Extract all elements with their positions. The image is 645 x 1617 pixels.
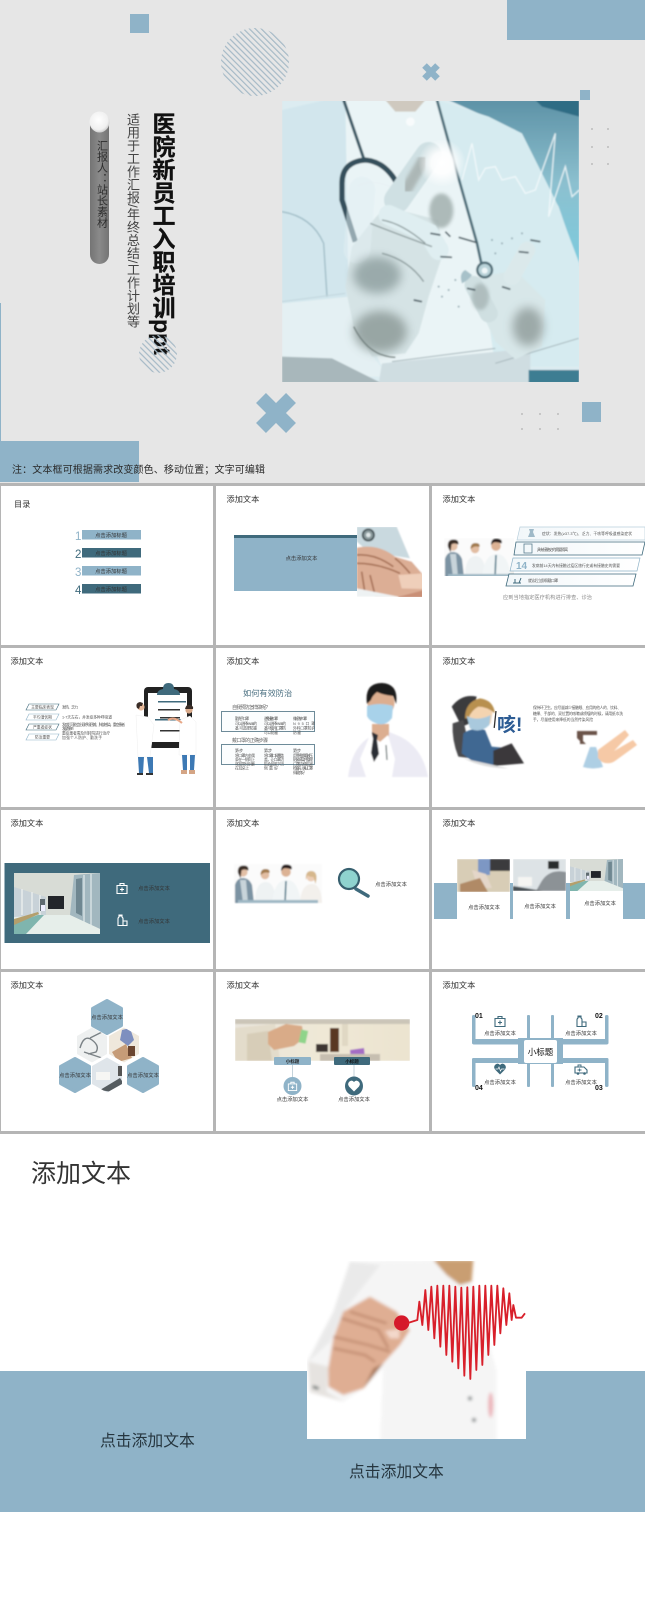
list: info labels: 防治重要 bbox=[35, 734, 50, 740]
card: dark band: 点击添加文本 bbox=[138, 884, 171, 892]
list: table of contents: 1 bbox=[75, 531, 81, 543]
panel: four-quadrant slide bbox=[432, 972, 645, 1131]
table: self prevention: N95口罩 bbox=[293, 721, 315, 726]
hex photo: chair bbox=[92, 1058, 122, 1092]
table: mask steps: 将口罩口鼻覆盖 bbox=[264, 753, 284, 758]
table: mask steps: 口罩边缘贴紧 bbox=[293, 762, 313, 766]
table: mask steps: 第二步 bbox=[264, 748, 272, 753]
text block: blue card: 点击添加文本 bbox=[286, 554, 318, 562]
decor: bottom-left block bbox=[0, 441, 139, 482]
diagram: rounded quadrants: 02 bbox=[595, 1013, 603, 1020]
photo: doctors bbox=[444, 538, 514, 576]
heading: 添加文本 bbox=[226, 656, 259, 666]
table: mask steps: 将口罩内金属 bbox=[235, 753, 255, 758]
tag: subtitle 2: 小标题 bbox=[345, 1058, 359, 1065]
table: self prevention bbox=[222, 704, 315, 735]
photo: lab bbox=[235, 1019, 410, 1061]
icon: big cross bbox=[261, 398, 291, 428]
photo: hands bbox=[357, 527, 422, 597]
list: info labels: 平均潜伏期 bbox=[33, 714, 52, 720]
step list: 具有接触史的需要隔离 bbox=[537, 547, 568, 552]
panel: clipboard slide bbox=[1, 648, 213, 807]
icon: bottles bbox=[577, 1016, 586, 1026]
decor: top-right block bbox=[507, 0, 645, 40]
table: self prevention: 自我预防怎样做呢? bbox=[232, 704, 268, 711]
step list: 14 bbox=[516, 561, 528, 572]
list: info labels: 严重者症状 bbox=[33, 724, 52, 730]
list: table of contents: 3 bbox=[75, 567, 81, 579]
photo: corridor bbox=[570, 859, 623, 891]
text: 点击添加文本 bbox=[375, 880, 408, 888]
heading: 添加文本 bbox=[226, 494, 259, 504]
list: info labels: 主要临床表现 bbox=[31, 704, 54, 710]
title: vertical heading: 医院新员工入职培训ppt bbox=[149, 112, 176, 355]
illustration: masked doctor bbox=[348, 683, 428, 777]
table: mask steps: 贴合鼻梁下巴 bbox=[264, 762, 284, 766]
icon: ambulance bbox=[575, 1065, 587, 1075]
diagram: rounded quadrants: 小标题 bbox=[528, 1047, 554, 1057]
panel: slide with doctors and steps bbox=[432, 486, 645, 645]
heading: 添加文本 bbox=[31, 1160, 131, 1188]
band bbox=[0, 1371, 645, 1512]
list: info labels: 发病后可能会出现呼吸困难、肺部感染，重症患者 bbox=[62, 722, 125, 727]
list: info labels: 发展为肺炎 bbox=[62, 726, 74, 731]
table: mask steps: 佩戴良好 bbox=[293, 770, 305, 775]
note text: 注：文本框可根据需求改变颜色、移动位置；文字可编辑 bbox=[12, 463, 265, 476]
illustration: clipboard and two doctors bbox=[136, 683, 196, 775]
icon: medkit bbox=[117, 884, 127, 894]
step list: 就诊后立即佩戴口罩 bbox=[528, 578, 558, 583]
icon: heart bbox=[494, 1064, 506, 1074]
panel: corridor slide bbox=[1, 810, 213, 969]
decor: square bottom right bbox=[582, 402, 601, 422]
icon: medkit circle bbox=[284, 1077, 302, 1095]
list: table of contents: 点击添加标题 bbox=[95, 549, 128, 557]
hex photo: stethoscope bbox=[77, 1028, 107, 1062]
table: mask steps: 在耳朵上 bbox=[235, 766, 249, 770]
table: self prevention: 基 可使用口罩防 bbox=[264, 726, 286, 730]
captions: 点击添加文本 bbox=[277, 1095, 309, 1103]
table: self prevention: 基 可选择防霾 bbox=[235, 726, 257, 730]
decor: left thin line bbox=[0, 303, 1, 441]
tag: subtitle 1 bbox=[274, 1057, 311, 1065]
table: mask steps: 将耳带分别套 bbox=[235, 762, 255, 766]
step list bbox=[506, 527, 645, 586]
hexagon cluster bbox=[59, 1000, 160, 1094]
table: self prevention: 防霾 bbox=[293, 730, 301, 735]
diagram: rounded quadrants: 点击添加文本 bbox=[484, 1078, 517, 1086]
decor: small square at photo corner bbox=[580, 90, 590, 100]
captions: 点击添加文本 bbox=[468, 903, 501, 911]
card: dark band bbox=[4, 863, 210, 943]
icon: heart circle bbox=[345, 1076, 363, 1096]
caption: 应到当地指定医疗机构进行排查、诊治 bbox=[503, 593, 592, 601]
captions bbox=[468, 899, 617, 911]
list: info labels: 重症患者需及时转院进行治疗 bbox=[62, 730, 110, 736]
table: self prevention: 勤洗手口罩 bbox=[235, 716, 249, 721]
decor: striped circle bbox=[221, 28, 289, 96]
panel: cough and handwash slide bbox=[432, 648, 645, 807]
hexagon cluster: 点击添加文本 bbox=[59, 1071, 92, 1079]
table: mask steps: 条在一侧向上 bbox=[235, 757, 255, 762]
captions bbox=[277, 1095, 371, 1103]
text: right caption: 点击添加文本 bbox=[349, 1463, 444, 1481]
card: dark band: 点击添加文本 bbox=[138, 917, 171, 925]
heading: 添加文本 bbox=[226, 818, 259, 828]
decor: small striped circle bbox=[139, 335, 178, 373]
table: mask steps bbox=[222, 737, 314, 775]
heading: 添加文本 bbox=[442, 818, 475, 828]
icon: bottles bbox=[118, 915, 127, 926]
list: table of contents: 点击添加标题 bbox=[95, 585, 128, 593]
heading: contents: 目录 bbox=[14, 500, 30, 509]
heading: 添加文本 bbox=[442, 494, 475, 504]
list: table of contents: 点击添加标题 bbox=[95, 531, 128, 539]
table: mask steps: 佩戴好 bbox=[264, 766, 278, 770]
table: self prevention: 可以防霾 bbox=[264, 730, 278, 735]
diagram: rounded quadrants: 03 bbox=[595, 1085, 603, 1092]
panel: three photos slide bbox=[432, 810, 645, 969]
heading: 添加文本 bbox=[10, 980, 43, 990]
connectors bbox=[292, 1065, 354, 1078]
panel: prevention slide bbox=[216, 648, 429, 807]
photo: nurse drawing heart bbox=[307, 1260, 526, 1442]
photo: dental chair bbox=[513, 859, 566, 891]
heading: 添加文本 bbox=[226, 980, 259, 990]
pill: presenter bbox=[90, 112, 110, 264]
diagram: rounded quadrants: 点击添加文本 bbox=[565, 1078, 598, 1086]
diagram: rounded quadrants: 点击添加文本 bbox=[484, 1029, 517, 1037]
table: mask steps: 用手将金属条按压 bbox=[293, 753, 313, 758]
subtitle: vertical: 适用于工作汇报/年终总结/工作计划等 bbox=[125, 113, 140, 329]
list: table of contents: 点击添加标题 bbox=[95, 567, 128, 575]
text: left caption: 点击添加文本 bbox=[100, 1432, 195, 1450]
list: info labels: 1-7天左右，并发症多种呼吸道 bbox=[62, 714, 112, 720]
photo: treatment bbox=[457, 859, 510, 892]
illustration: coughing person bbox=[452, 696, 524, 768]
subheading: prevention: 如何有效防治 bbox=[243, 688, 292, 698]
hexagon cluster: 点击添加文本 bbox=[127, 1071, 160, 1079]
table: mask steps: 戴口罩的正确步骤 bbox=[232, 737, 268, 744]
list: table of contents: 4 bbox=[75, 585, 82, 597]
list: table of contents bbox=[75, 530, 141, 597]
decor: small top square bbox=[130, 14, 149, 33]
panel: contents slide bbox=[1, 486, 213, 645]
diagram: rounded quadrants: 点击添加文本 bbox=[565, 1029, 598, 1037]
heading: 添加文本 bbox=[442, 980, 475, 990]
icon: small cross bbox=[424, 66, 438, 78]
table: mask steps: 第三步 bbox=[293, 748, 301, 753]
list: info labels: 加强个人防护、勤洗手 bbox=[62, 735, 102, 740]
captions: 点击添加文本 bbox=[524, 902, 557, 910]
table: self prevention: 做好防护口罩 bbox=[293, 716, 307, 721]
panel: final slide bbox=[0, 1134, 645, 1617]
photo: doctors bbox=[234, 864, 322, 903]
text block: hygiene advice bbox=[533, 705, 623, 722]
decor: dot grid right bbox=[591, 128, 609, 165]
table: mask steps: 第一步 bbox=[235, 748, 243, 753]
table: self prevention: 可以选择KN95的 bbox=[264, 721, 286, 726]
captions: 点击添加文本 bbox=[338, 1095, 371, 1103]
decor: dot grid bottom bbox=[521, 413, 559, 430]
list: info labels: 发热、乏力 bbox=[62, 704, 78, 710]
heading: 添加文本 bbox=[442, 656, 475, 666]
illustration: handwashing bbox=[577, 730, 637, 768]
text block: blue card bbox=[234, 535, 357, 591]
table: self prevention: 避免接触口罩 bbox=[264, 716, 278, 721]
panel: cover slide bbox=[0, 0, 645, 483]
icon: magnifier bbox=[339, 869, 368, 896]
hexagon cluster: 点击添加文本 bbox=[91, 1013, 124, 1021]
table: mask steps: 检查完，确认口罩 bbox=[293, 766, 313, 770]
diagram: rounded quadrants bbox=[472, 1013, 608, 1092]
panel: lab photo slide bbox=[216, 972, 429, 1131]
table: mask steps: 盖，让口罩边 bbox=[264, 757, 284, 762]
table: mask steps: 贴紧鼻梁并整理 bbox=[293, 757, 313, 762]
text block: hygiene advice: 糖果、手部的、双位置的咳嗽或喷嚏的时候，请用纸巾洗 bbox=[533, 711, 623, 716]
photo: doctor touching virtual screen bbox=[282, 100, 582, 383]
text block: hygiene advice: 保持环卫生。应尽量减少接触眼、应用的他人的、饮料、 bbox=[533, 705, 621, 710]
text block: hygiene advice: 手，尽量使用来降低的当然传染风险 bbox=[533, 717, 593, 722]
panel: hexagon slide bbox=[1, 972, 213, 1131]
photo: corridor bbox=[14, 873, 100, 934]
step list: 发病前14天内有接触过疫区旅行史或有接触史的需要 bbox=[532, 563, 620, 568]
pill: presenter: 汇报人：站长素材 bbox=[96, 140, 108, 228]
text: cough: 咳! bbox=[497, 713, 522, 736]
table: self prevention: 外科口罩防护 bbox=[293, 726, 315, 730]
heading: 添加文本 bbox=[10, 656, 43, 666]
diagram: rounded quadrants: 01 bbox=[475, 1013, 483, 1020]
heading: 添加文本 bbox=[10, 818, 43, 828]
captions: 点击添加文本 bbox=[584, 899, 617, 907]
diagram: rounded quadrants: 04 bbox=[475, 1085, 483, 1092]
blocks behind photos bbox=[434, 883, 645, 919]
table: self prevention: 可以选择KN95的 bbox=[235, 721, 257, 726]
hex photo: lab bbox=[109, 1028, 139, 1062]
step list: 症状：发热(≥37.3℃)、乏力、干咳等呼吸道感染症状 bbox=[542, 531, 632, 536]
tag: subtitle 2 bbox=[334, 1057, 370, 1065]
panel: slide with hands photo bbox=[216, 486, 429, 645]
list: table of contents: 2 bbox=[75, 549, 81, 561]
list: info labels bbox=[26, 704, 125, 740]
icon: medkit bbox=[495, 1016, 505, 1026]
panel: magnifier slide bbox=[216, 810, 429, 969]
tag: subtitle 1: 小标题 bbox=[286, 1058, 300, 1065]
